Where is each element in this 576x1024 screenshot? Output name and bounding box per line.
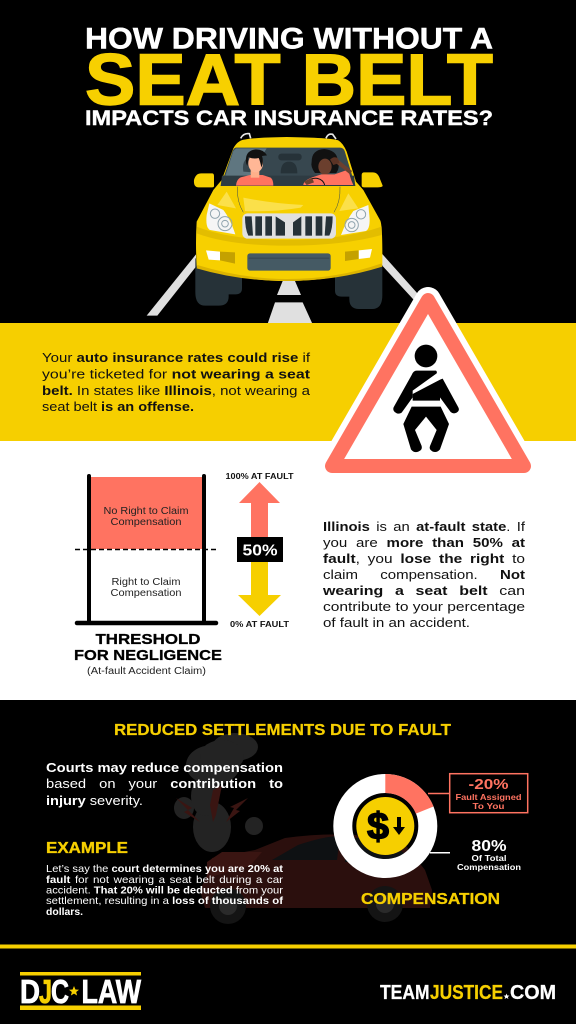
road markings	[147, 253, 423, 324]
text: courts may reduce	[46, 760, 283, 808]
zone labels: Right to Claim	[112, 577, 180, 588]
logo: DJC LAW: C	[51, 973, 69, 1010]
callout: total compensation: Compensation	[457, 862, 521, 872]
caption	[74, 631, 222, 677]
headlights	[206, 203, 370, 235]
text: courts may reduce: Courts may reduce compensation	[46, 760, 283, 775]
heading: example: EXAMPLE	[46, 840, 128, 857]
website: JUSTICE	[430, 981, 503, 1004]
donut caption: COMPENSATION	[361, 891, 500, 908]
text: insurance rates: Your auto insurance rates could rise if	[42, 350, 310, 365]
illustration: yellow car on road	[147, 134, 423, 324]
logo: DJC LAW	[20, 972, 142, 1010]
driver man	[236, 149, 273, 186]
belted figure	[393, 345, 459, 452]
caption: FOR NEGLIGENCE	[74, 647, 222, 664]
grille	[242, 213, 336, 239]
seats and rear mirror	[278, 154, 302, 173]
text: example: accident. That 20% will be deducted from your	[46, 886, 284, 896]
website	[380, 981, 556, 1004]
text: example: dollars.	[46, 907, 83, 918]
sparks	[176, 785, 248, 822]
text: at-fault state: wearing a seat belt can	[322, 583, 525, 598]
callout: total compensation: Of Total	[472, 853, 506, 863]
background: wrecked car and smoke	[174, 733, 432, 924]
passenger woman	[303, 149, 353, 185]
posts and base	[89, 476, 204, 623]
heading: reduced settlements: REDUCED SETTLEMENTS DUE TO FAULT	[114, 722, 452, 739]
text: insurance rates: you’re ticketed for not wearing a seat	[42, 366, 311, 382]
text: example: fault for not wearing a seat belt during a car	[46, 875, 284, 886]
white section	[0, 441, 576, 700]
callout: fault assigned: To You	[472, 801, 504, 811]
callout: fault assigned	[428, 774, 528, 813]
caption: (At-fault Accident Claim)	[87, 666, 206, 677]
title: IMPACTS CAR INSURANCE RATES?	[85, 107, 493, 130]
text: insurance rates: seat belt is an offense.	[42, 399, 194, 414]
text: example: settlement, resulting in a loss of thousands of	[46, 896, 284, 907]
callout: fault assigned: -20%	[468, 776, 508, 793]
lower vent and fog lights	[206, 249, 372, 271]
callout: fault assigned: Fault Assigned	[456, 792, 522, 802]
fault scale arrows: 100% AT FAULT	[226, 472, 294, 481]
warning triangle with belted figure	[332, 300, 524, 466]
text: at-fault state: of fault in an accident.	[323, 615, 470, 630]
car body	[200, 834, 432, 908]
fault scale arrows	[226, 472, 294, 629]
red zone	[91, 477, 202, 549]
fault slice	[385, 774, 434, 814]
car glass	[272, 836, 340, 860]
text: example: Let’s say the court determines you are 20% at	[46, 864, 284, 875]
roof clips	[241, 134, 336, 139]
text: example	[46, 864, 284, 918]
zone labels: No Right to Claim	[104, 506, 188, 517]
title: SEAT BELT	[85, 40, 493, 120]
callout: total compensation: 80%	[472, 838, 507, 855]
lower body shading	[197, 227, 382, 246]
logo: DJC LAW: LAW	[82, 973, 142, 1010]
caption: THRESHOLD	[96, 631, 201, 648]
callout: total compensation	[430, 838, 521, 872]
mirrors	[194, 172, 383, 187]
text: courts may reduce: based on your contribution to	[46, 776, 283, 791]
logo: DJC LAW: J	[39, 973, 52, 1010]
crumpled hood	[207, 852, 262, 878]
logo: DJC LAW: D	[20, 973, 40, 1010]
threshold diagram	[74, 476, 222, 677]
smoke	[174, 733, 263, 852]
donut chart: compensation	[343, 774, 434, 868]
text: at-fault state: contribute to your percentage	[323, 599, 525, 614]
website: COM	[510, 981, 556, 1004]
text: insurance rates: belt. In states like Illinois , not wearing a	[42, 383, 311, 398]
zone labels: Compensation	[110, 517, 182, 528]
zone labels	[104, 506, 188, 599]
icon: coin with down arrow: $	[367, 806, 389, 848]
hood details	[217, 192, 358, 211]
text: at-fault state: claim compensation. Not	[323, 567, 526, 582]
text: at-fault state: you are more than 50% at	[323, 535, 526, 550]
website: TEAM	[380, 981, 430, 1004]
fault scale arrows: 50%	[242, 542, 278, 560]
text: at-fault state: fault , you lose the right to	[323, 551, 525, 566]
yellow band	[0, 323, 576, 441]
car body	[196, 137, 382, 281]
wheels	[210, 886, 403, 924]
text: at-fault state	[322, 519, 526, 630]
tyres	[195, 258, 382, 309]
footer divider	[0, 944, 576, 948]
zone labels: Compensation	[110, 588, 182, 599]
text: at-fault state: Illinois is an at-fault state . If	[323, 519, 525, 534]
text: insurance rates	[42, 350, 311, 414]
title: HOW DRIVING WITHOUT A	[85, 22, 493, 56]
windshield	[221, 148, 355, 186]
text: courts may reduce: injury severity.	[46, 793, 143, 808]
fault scale arrows: 0% AT FAULT	[230, 620, 289, 629]
